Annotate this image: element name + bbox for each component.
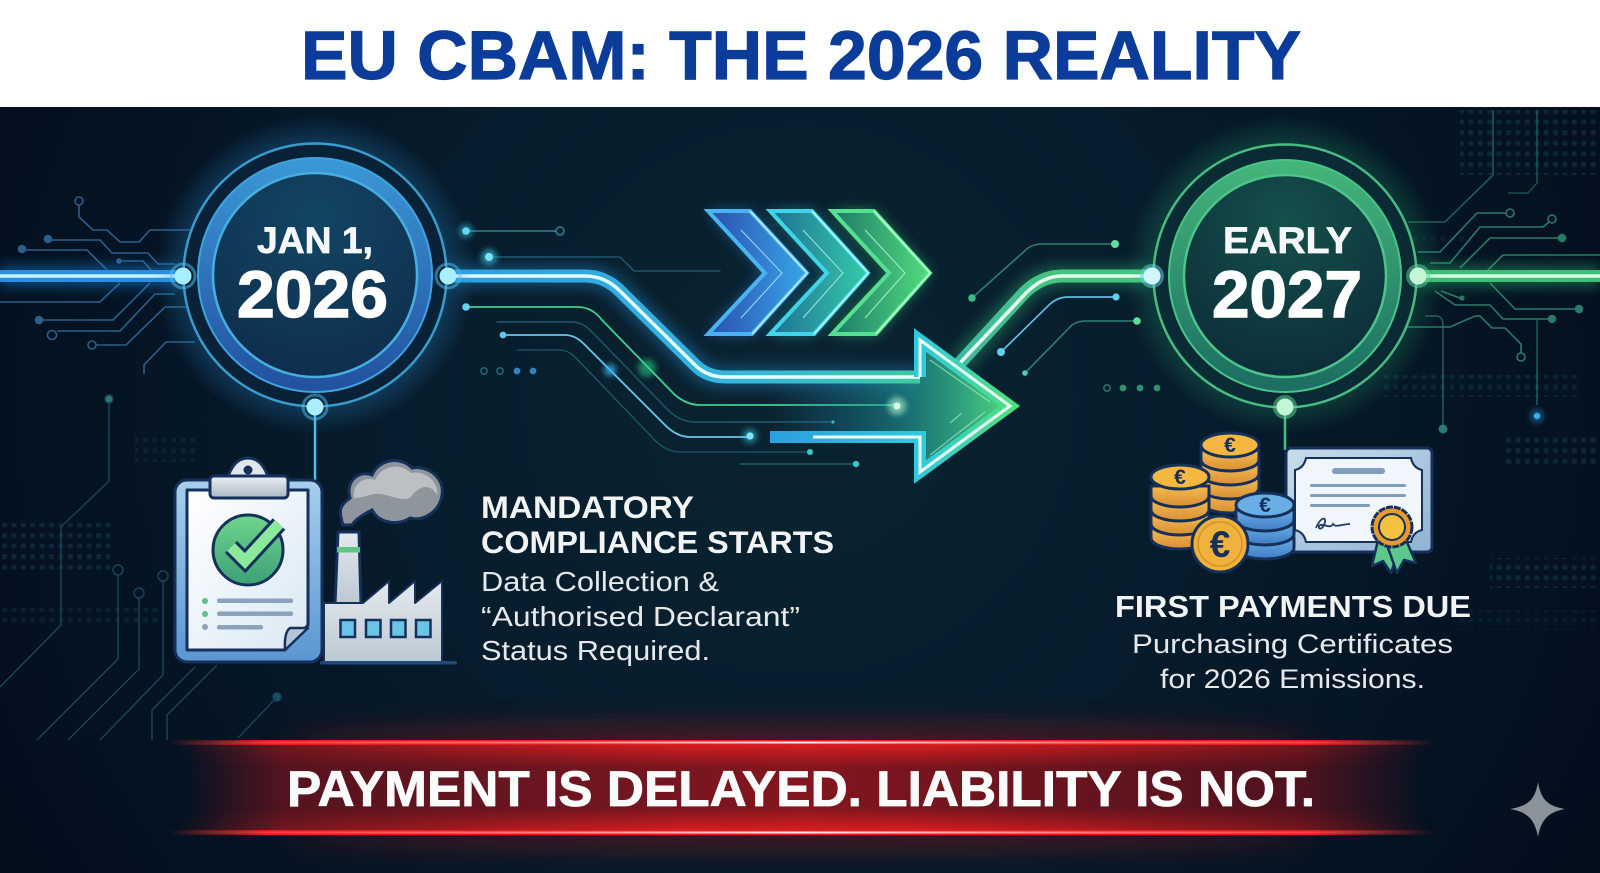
- header band: [0, 0, 1600, 107]
- text: mandatory compliance: [481, 489, 834, 666]
- stream lines into arrow: [462, 303, 897, 467]
- lower left circuit traces: [0, 395, 281, 740]
- text: mandatory compliance: “Authorised Declarant”: [481, 601, 800, 632]
- icon: clipboard with check: [175, 458, 322, 662]
- front coin: €: [1210, 524, 1230, 565]
- three chevrons: [708, 211, 930, 334]
- blue stack: [1236, 493, 1294, 559]
- date label: JAN 1,: [257, 220, 373, 261]
- right side stream lines: [968, 240, 1160, 391]
- text: mandatory compliance: Status Required.: [481, 635, 710, 666]
- background data dot grids: [0, 110, 1600, 630]
- icon: sparkle watermark: [1510, 782, 1565, 837]
- back gold stack: €: [1224, 434, 1236, 457]
- text: mandatory compliance: COMPLIANCE STARTS: [481, 524, 834, 560]
- upper stream lines: [459, 224, 720, 374]
- back gold stack: [1201, 433, 1259, 513]
- left circuit traces: [0, 197, 195, 374]
- text: first payments: [1115, 589, 1471, 694]
- text: mandatory compliance: MANDATORY: [481, 489, 694, 525]
- left gold stack: [1151, 465, 1209, 549]
- icon: euro coins and certificate: [1151, 433, 1432, 573]
- main flowing arrow: [448, 276, 1152, 472]
- connector to clipboard: [314, 407, 316, 480]
- warning banner: [168, 726, 1436, 848]
- year: 2026: [237, 257, 388, 331]
- text: first payments: for 2026 Emissions.: [1160, 664, 1425, 694]
- early label: EARLY: [1223, 220, 1352, 261]
- icon: factory with smoke: [320, 461, 457, 664]
- banner message: PAYMENT IS DELAYED. LIABILITY IS NOT.: [287, 761, 1315, 817]
- certificate: [1286, 448, 1432, 573]
- text: first payments: FIRST PAYMENTS DUE: [1115, 589, 1471, 624]
- text: mandatory compliance: Data Collection &: [481, 566, 719, 597]
- milestone: Early 2027: [1125, 115, 1445, 435]
- front coin: [1192, 516, 1248, 572]
- title: EU CBAM: THE 2026 REALITY: [301, 17, 1301, 94]
- connector to certificate: [1284, 407, 1286, 450]
- right timeline beam: [1418, 266, 1600, 286]
- left gold stack: €: [1174, 466, 1186, 489]
- text: first payments: Purchasing Certificates: [1132, 629, 1453, 659]
- year: 2027: [1212, 257, 1362, 331]
- blue stack: €: [1259, 494, 1271, 517]
- milestone: Jan 1, 2026: [155, 115, 475, 435]
- left timeline beam: [0, 266, 183, 286]
- right circuit traces: [1395, 110, 1600, 434]
- blue node at lower right: [1530, 409, 1544, 423]
